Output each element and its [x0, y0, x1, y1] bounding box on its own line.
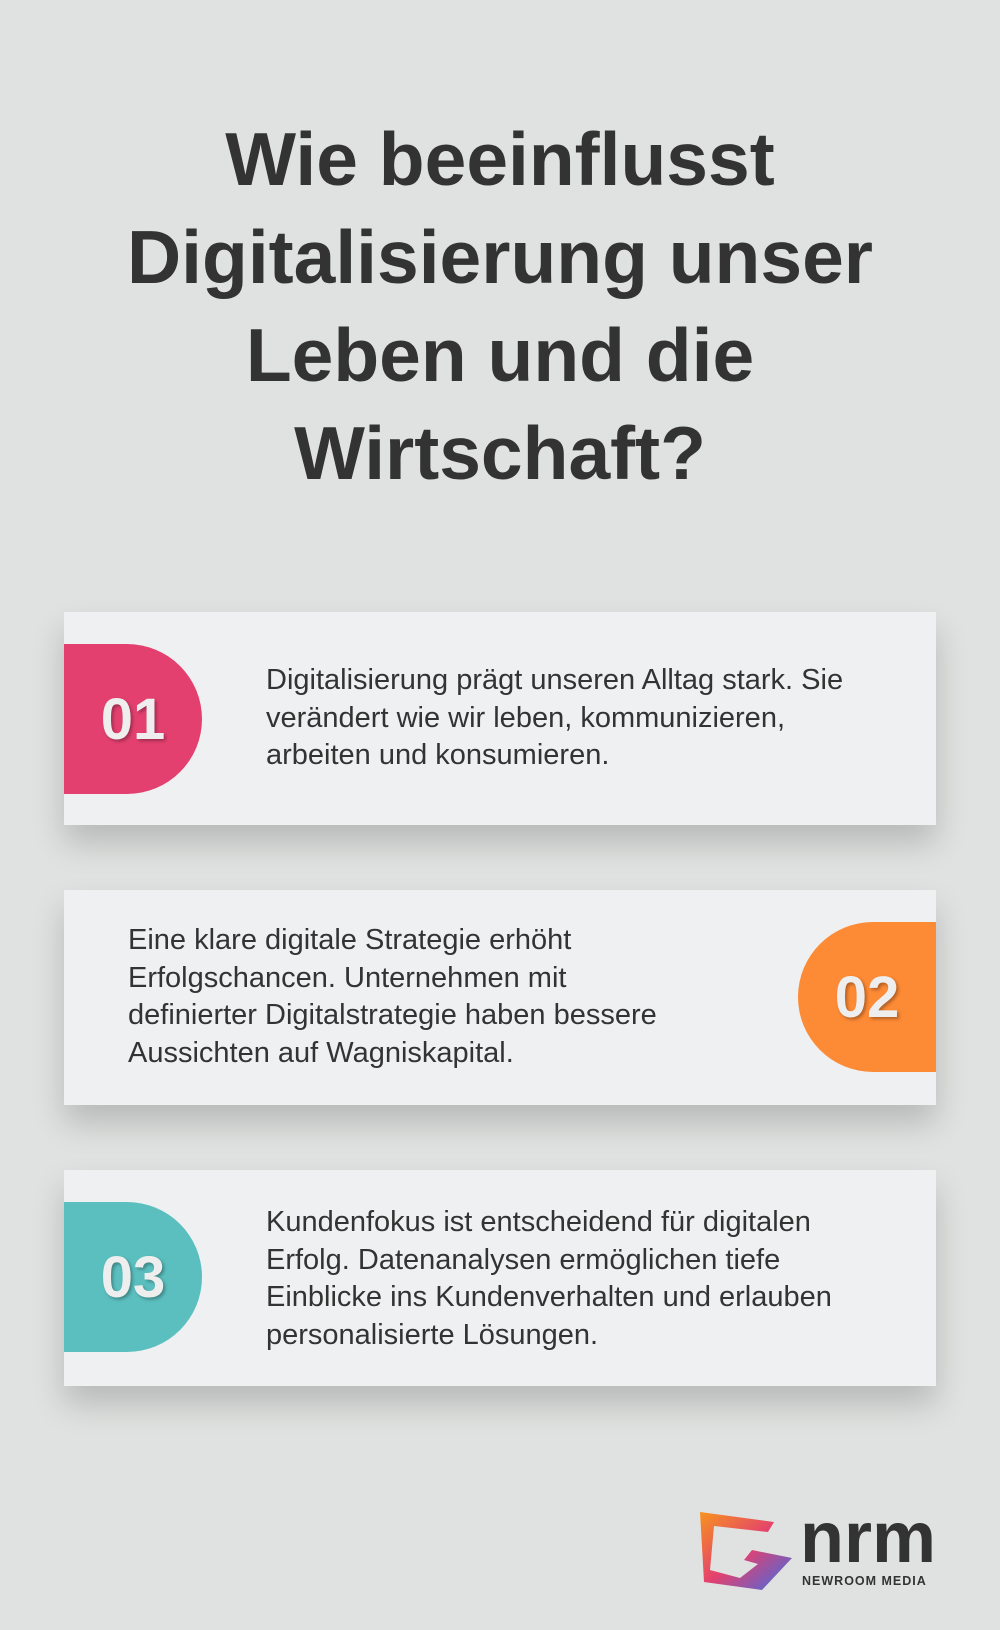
- text 3: Erfolg. Datenanalysen ermöglichen tiefe: [266, 1244, 780, 1276]
- text 2: [128, 924, 657, 1068]
- text 2: definierter Digitalstrategie haben bessere: [128, 999, 657, 1031]
- panel: card 2: [64, 890, 936, 1105]
- text 2: Erfolgschancen. Unternehmen mit: [128, 962, 566, 994]
- badge 03: [64, 1202, 202, 1352]
- panel: card 3: [64, 1170, 936, 1386]
- text 3: [266, 1206, 832, 1350]
- text 3: Einblicke ins Kundenverhalten und erlauben: [266, 1281, 832, 1313]
- badge 02: [798, 922, 936, 1072]
- text 1: verändert wie wir leben, kommunizieren,: [266, 702, 785, 734]
- badge 02: 02: [835, 964, 899, 1030]
- text 1: Digitalisierung prägt unseren Alltag stark. Sie: [266, 664, 843, 696]
- icon: logo mark: [700, 1512, 792, 1590]
- text 1: arbeiten und konsumieren.: [266, 739, 609, 771]
- badge 01: 01: [101, 686, 165, 752]
- title: Wie beeinflusst: [225, 117, 775, 201]
- text 3: personalisierte Lösungen.: [266, 1318, 598, 1350]
- title: [127, 117, 873, 495]
- text 2: Aussichten auf Wagniskapital.: [128, 1036, 514, 1068]
- text 2: Eine klare digitale Strategie erhöht: [128, 924, 571, 956]
- text 3: Kundenfokus ist entscheidend für digitalen: [266, 1206, 811, 1238]
- panel: card 1: [64, 612, 936, 825]
- badge 03: 03: [101, 1244, 165, 1310]
- text 1: [266, 664, 843, 771]
- title: Leben und die: [246, 313, 754, 397]
- logo text: nrm: [800, 1498, 936, 1578]
- logo: NEWROOM MEDIA: [802, 1574, 927, 1588]
- title: Digitalisierung unser: [127, 215, 873, 299]
- logo: [700, 1498, 936, 1590]
- title: Wirtschaft?: [294, 411, 706, 495]
- badge 01: [64, 644, 202, 794]
